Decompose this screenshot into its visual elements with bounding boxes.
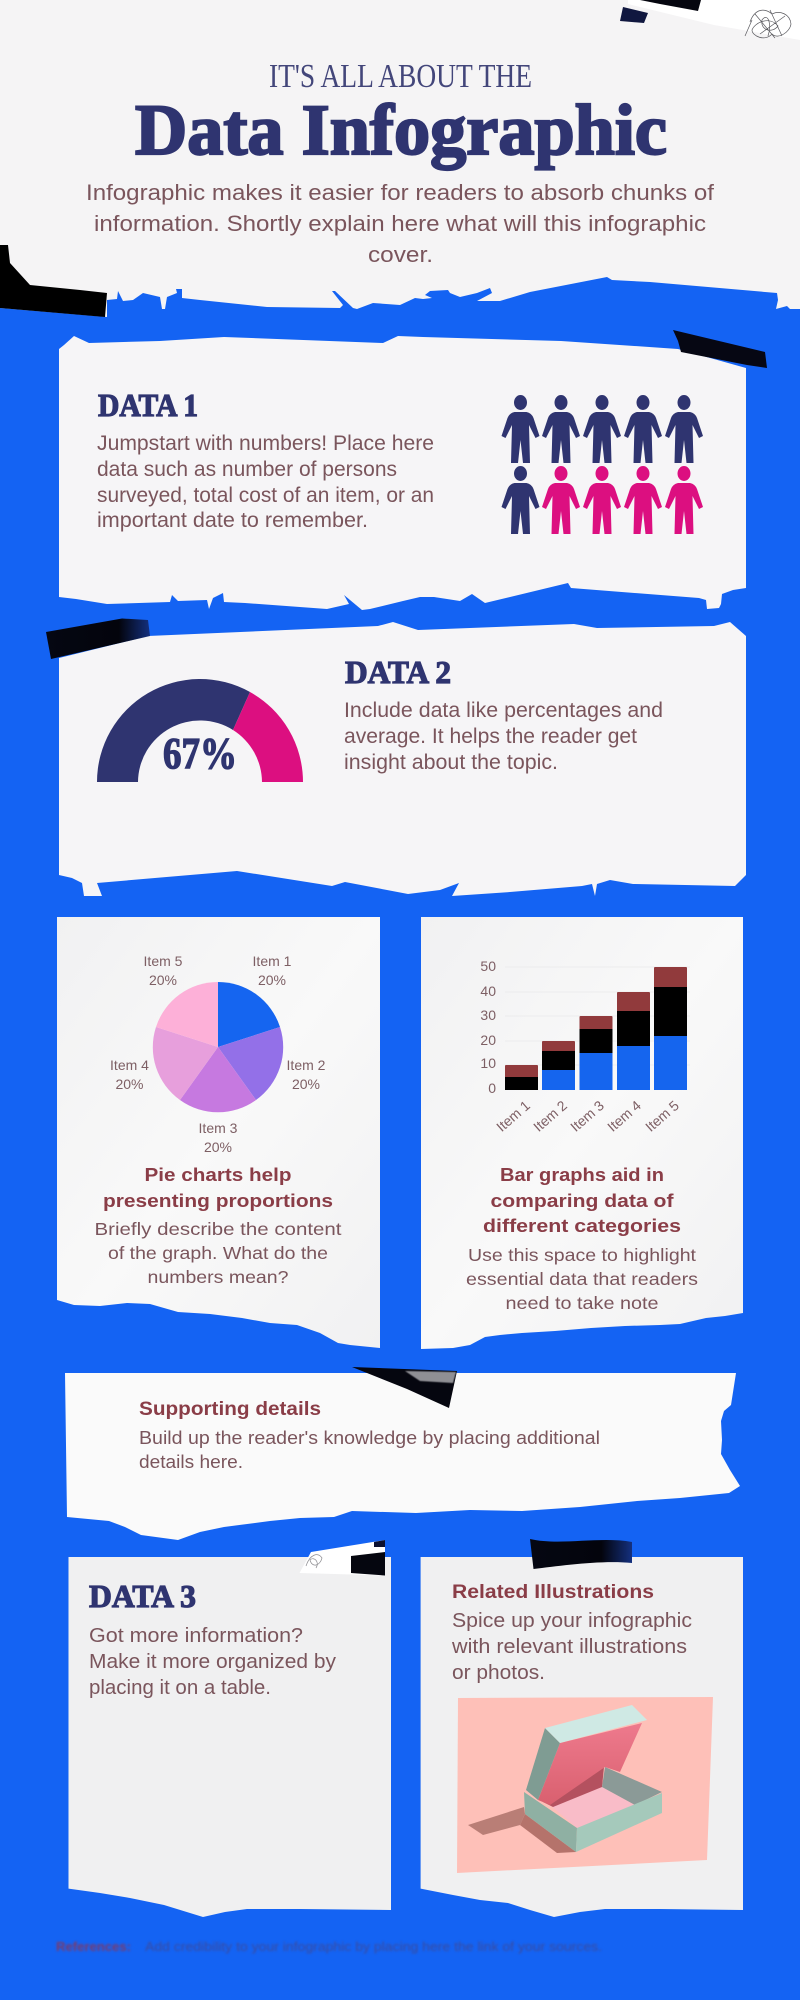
intro text: Infographic makes it easier for readers to absorb chunks of [86, 180, 715, 205]
icon: people chart [502, 395, 703, 534]
pie labels: Item 5 [144, 953, 183, 969]
text: data 1: data such as number of persons [97, 458, 397, 481]
heading: pie chart [103, 1164, 333, 1211]
text: bar chart: essential data that readers [466, 1269, 698, 1289]
heading: pie chart: Pie charts help [144, 1164, 292, 1185]
tape: data 1 [673, 330, 767, 368]
tape: related illustrations [530, 1539, 632, 1569]
text: data 2 [344, 699, 663, 774]
heading: pie chart: presenting proportions [103, 1190, 333, 1211]
text: pie chart: numbers mean? [148, 1267, 289, 1287]
panel: data 1 [59, 330, 767, 610]
panel: pie chart [57, 917, 380, 1348]
heading: bar chart: Bar graphs aid in [500, 1164, 664, 1185]
stacked bar chart: Item 4 [604, 1097, 644, 1135]
pie labels: 20% [258, 972, 286, 988]
eyebrow: IT'S ALL ABOUT THE [269, 58, 532, 95]
stacked bar chart: 10 [480, 1055, 496, 1071]
heading: data 3: DATA 3 [89, 1578, 196, 1614]
text: supporting details: details here. [139, 1452, 243, 1472]
panel: related illustrations [421, 1539, 743, 1917]
panel: data 3 [68, 1540, 391, 1917]
stacked bar chart: 20 [480, 1032, 496, 1048]
text: related illustrations [451, 1610, 692, 1684]
stacked bar chart: 30 [480, 1007, 496, 1023]
text: pie chart: of the graph. What do the [108, 1243, 328, 1263]
stacked bar chart: 40 [480, 983, 496, 999]
header panel [0, 0, 800, 317]
text: related illustrations: with relevant illustrations [451, 1636, 687, 1658]
stacked bar chart: Item 5 [642, 1097, 682, 1135]
stacked bar chart: 0 [488, 1080, 496, 1096]
pie labels: Item 3 [199, 1120, 238, 1136]
stacked bar chart [480, 958, 690, 1135]
text: bar chart: need to take note [506, 1293, 658, 1313]
text: data 3: Make it more organized by [89, 1651, 336, 1673]
heading: data 1: DATA 1 [98, 387, 198, 423]
panel: bar chart [421, 917, 743, 1349]
text: bar chart: Use this space to highlight [468, 1245, 696, 1265]
stacked bar chart: 50 [480, 958, 496, 974]
title: Data Infographic [135, 90, 667, 170]
heading: bar chart [483, 1164, 681, 1236]
heading: supporting details: Supporting details [139, 1399, 321, 1420]
text: data 1: Jumpstart with numbers! Place here [97, 432, 434, 455]
stacked bar chart: Item 1 [493, 1097, 533, 1135]
panel: data 2 [46, 618, 746, 896]
text: related illustrations: Spice up your infographic [452, 1610, 692, 1632]
pie labels: 20% [149, 972, 177, 988]
text: pie chart [94, 1219, 342, 1287]
illustration: open box on pink [457, 1697, 713, 1873]
pie labels: Item 1 [253, 953, 292, 969]
text: data 1: important date to remember. [97, 509, 368, 532]
text: bar chart [466, 1245, 698, 1313]
gauge chart 67% [97, 679, 303, 782]
tape: supporting details [352, 1367, 457, 1408]
pie labels: 20% [204, 1139, 232, 1155]
references: References: [56, 1939, 131, 1954]
tape: data 3 [300, 1540, 385, 1576]
text: data 2: average. It helps the reader get [344, 725, 637, 748]
heading: related illustrations: Related Illustrations [452, 1582, 654, 1603]
pie labels: Item 4 [110, 1057, 149, 1073]
pie labels: 20% [292, 1076, 320, 1092]
gauge chart 67%: 67% [163, 729, 237, 778]
pie labels: 20% [115, 1076, 144, 1092]
text: data 2: insight about the topic. [344, 751, 558, 774]
text: pie chart: Briefly describe the content [94, 1219, 342, 1239]
tape: header left [0, 245, 107, 317]
text: data 1: surveyed, total cost of an item, or an [97, 484, 434, 507]
text: related illustrations: or photos. [452, 1662, 545, 1684]
pie chart [153, 982, 283, 1112]
text: data 3: placing it on a table. [89, 1677, 271, 1699]
pie labels [110, 953, 326, 1155]
heading: data 2: DATA 2 [345, 654, 451, 690]
references: Add credibility to your infographic by placing here the link of your sources. [145, 1939, 602, 1954]
text: supporting details [139, 1428, 600, 1472]
intro text: cover. [368, 242, 433, 267]
tape: data 2 [46, 618, 150, 659]
intro text [86, 180, 715, 267]
tape: top right [620, 0, 800, 40]
panel: supporting details [65, 1367, 740, 1540]
stacked bar chart: Item 2 [530, 1097, 570, 1135]
text: data 3 [89, 1625, 336, 1699]
heading: bar chart: different categories [483, 1215, 681, 1236]
stacked bar chart: Item 3 [567, 1097, 607, 1135]
text: supporting details: Build up the reader's knowledge by placing additional [139, 1428, 600, 1448]
text: data 2: Include data like percentages and [344, 699, 663, 722]
pie labels: Item 2 [287, 1057, 326, 1073]
text: data 3: Got more information? [89, 1625, 303, 1647]
intro text: information. Shortly explain here what will this infographic [94, 211, 706, 236]
text: data 1 [97, 432, 434, 532]
heading: bar chart: comparing data of [490, 1190, 674, 1211]
